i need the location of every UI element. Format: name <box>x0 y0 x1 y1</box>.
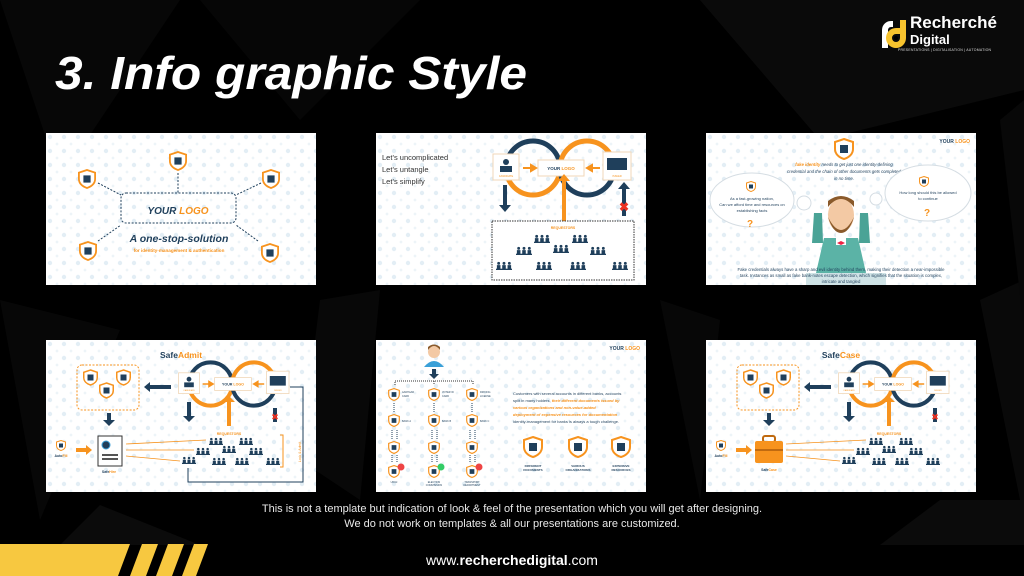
panel: thumbnail 6 SafeCase: ✖ <box>931 412 939 422</box>
panel: thumbnail 5 banks: UIDAI <box>391 481 398 484</box>
panel: thumbnail 5 banks: TRANSPORT <box>464 481 480 484</box>
caption text <box>262 503 762 530</box>
logo: Recherché <box>910 13 997 32</box>
panel: thumbnail 3 fake identity: YOUR LOGO <box>939 139 970 145</box>
icon: logo mark <box>882 20 906 48</box>
panel: thumbnail 5 banks: ORGANIZATIONS <box>566 468 590 472</box>
panel: thumbnail 5 banks: Customers with several accounts in different banks, accounts <box>513 391 621 396</box>
panel: thumbnail 5 banks: COMMISSION <box>426 484 442 487</box>
panel: thumbnail 5 banks: BANK A <box>402 420 411 423</box>
panel: thumbnail 5 banks: BANK B <box>442 420 452 423</box>
caption text: We do not work on templates & all our presentations are customized. <box>344 518 680 530</box>
panel: thumbnail 3 fake identity: intricate and tangled <box>822 279 861 284</box>
icon: man <box>812 196 870 273</box>
panel: thumbnail 5 banks: BANK C <box>480 420 490 423</box>
panel: thumbnail 4 SafeAdmit: ✖ <box>271 412 279 422</box>
panel: thumbnail 3 fake identity: to continue <box>918 196 939 201</box>
logo: Digital <box>910 32 950 47</box>
panel: thumbnail 5 banks: ELECTION <box>428 481 440 484</box>
panel: thumbnail 5 banks: DRIVING <box>480 391 490 394</box>
panel: thumbnail 3 fake identity: Can we afford time and resources on <box>719 202 785 207</box>
panel: thumbnail 5 banks <box>376 340 646 492</box>
panel: thumbnail 5 banks: AADHAAR <box>402 391 414 394</box>
panel: thumbnail 5 banks: DEPARTMENT <box>464 484 481 487</box>
logo: PRESENTATIONS | DIGITALISATION | AUTOMATION <box>898 48 991 52</box>
panel: thumbnail 5 banks: split in many holders, their different documents issued by <box>513 398 619 403</box>
panel: thumbnail 5 banks: YOUR LOGO <box>609 346 640 352</box>
website url: www.recherchedigital.com <box>426 552 598 568</box>
panel: thumbnail 2 untangle: Let’s untangle <box>382 165 429 174</box>
panel: thumbnail 3 fake identity: ? <box>924 208 930 219</box>
panel: thumbnail 5 banks: various organizations and non-value-added <box>513 405 596 410</box>
panel: thumbnail 4 SafeAdmit <box>46 340 316 492</box>
panel: thumbnail 2 untangle: ✖ <box>619 200 629 214</box>
panel: thumbnail 5 banks: DOCUMENTS <box>523 468 543 472</box>
panel: thumbnail 4 SafeAdmit: SafeHire <box>102 470 116 474</box>
panel: thumbnail 5 banks: CARD <box>402 395 409 398</box>
panel: thumbnail 2 untangle: Let’s uncomplicated <box>382 153 448 162</box>
panel: thumbnail 6 SafeCase: REQUESTORS <box>877 432 902 436</box>
logo <box>882 13 997 52</box>
panel: thumbnail 4 SafeAdmit: Lock & Admit <box>298 442 302 462</box>
panel: thumbnail 5 banks: RESOURCES <box>611 468 631 472</box>
panel: thumbnail 5 banks: VOTER ID <box>442 391 454 394</box>
panel: thumbnail 1 one-stop-solution: YOUR LOGO <box>147 206 209 217</box>
panel: thumbnail 6 SafeCase: SafeCase <box>822 350 860 360</box>
panel: thumbnail 3 fake identity: How long should this be allowed <box>899 190 957 195</box>
panel: thumbnail 4 SafeAdmit: REQUESTORS <box>217 432 242 436</box>
panel: thumbnail 3 fake identity: ? <box>747 219 753 230</box>
yellow stripes <box>0 544 208 576</box>
panel: thumbnail 5 banks: DIFFERENT <box>525 464 542 468</box>
panel: thumbnail 2 untangle: REQUESTORS <box>551 226 576 230</box>
panel: thumbnail 3 fake identity: task. Instances as small as fake bank-notes escape detection, which signifies that the situation is complex, <box>740 273 942 278</box>
panel: thumbnail 2 untangle: Let’s simplify <box>382 177 425 186</box>
panel: thumbnail 5 banks: CARD <box>442 395 449 398</box>
panel: thumbnail 1 one-stop-solution: A one-stop-solution <box>129 233 228 245</box>
title: 3. Info graphic Style <box>55 47 527 99</box>
panel: thumbnail 6 SafeCase: AutoFill <box>714 454 728 458</box>
panel: thumbnail 6 SafeCase <box>706 340 976 492</box>
panel: thumbnail 5 banks: deployment of expensive resources for documentation <box>513 412 618 417</box>
panel: thumbnail 5 banks: VARIOUS <box>571 464 585 468</box>
panel: thumbnail 3 fake identity: fake identity needs to get just one identity-defining <box>795 162 893 167</box>
panel: thumbnail 5 banks: LICENSE <box>480 395 491 398</box>
panel: thumbnail 1 one-stop-solution <box>46 133 316 285</box>
panel: thumbnail 3 fake identity: Fake credentials always have a sharp and evil identity behind them, making their detection a near-impossible <box>737 267 945 272</box>
panel: thumbnail 6 SafeCase: SafeCase <box>761 468 777 472</box>
panel: thumbnail 3 fake identity: As a fast-growing nation, <box>730 196 774 201</box>
panel: thumbnail 4 SafeAdmit: SafeAdmit <box>160 350 202 360</box>
icon: briefcase <box>755 436 783 463</box>
icon: shields <box>79 152 279 262</box>
panel: thumbnail 1 one-stop-solution: for identity-management & authentication <box>134 248 225 253</box>
caption text: This is not a template but indication of look & feel of the presentation which you will get after designing. <box>262 503 762 515</box>
panel: thumbnail 3 fake identity: credential and the chain of other documents gets completed <box>787 169 902 174</box>
panel: thumbnail 5 banks: EXPENSIVE <box>612 464 630 468</box>
panel: thumbnail 3 fake identity <box>706 133 976 285</box>
panel: thumbnail 3 fake identity: in no time. <box>834 176 854 181</box>
panel: thumbnail 2 untangle <box>376 133 646 285</box>
panel: thumbnail 4 SafeAdmit: AutoFill <box>54 454 68 458</box>
panel: thumbnail 5 banks: identity-management for banks is always a tough challenge. <box>513 419 619 424</box>
panel: thumbnail 3 fake identity: establishing facts <box>737 208 767 213</box>
